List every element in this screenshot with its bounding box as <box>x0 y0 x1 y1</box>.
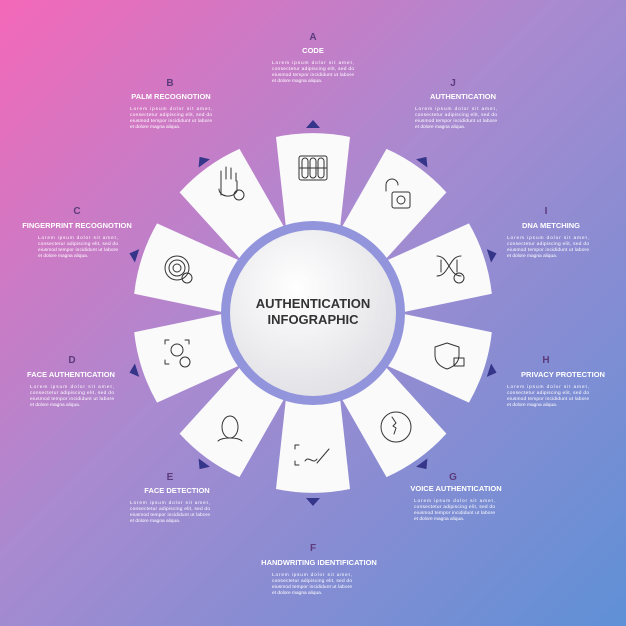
label D <box>27 355 115 408</box>
label B: et dolore magna aliqua. <box>130 124 180 130</box>
label E <box>130 472 210 524</box>
icon: palm <box>219 167 244 200</box>
icon: face detection <box>218 416 242 441</box>
label I: I <box>545 206 548 217</box>
label I: eiusmod tempor incididunt ut labore <box>507 247 589 253</box>
label F: et dolore magna aliqua. <box>272 590 322 596</box>
label D: consectetur adipiscing elit, sed do <box>30 390 114 396</box>
label D: et dolore magna aliqua. <box>30 402 80 408</box>
label E: Lorem ipsum dolor sit amet, <box>130 500 210 506</box>
label I: DNA METCHING <box>522 221 580 230</box>
pointer triangles <box>127 120 499 506</box>
icon: shield lock <box>435 343 464 369</box>
label C: C <box>73 206 81 217</box>
label H: Lorem ipsum dolor sit amet, <box>507 384 589 390</box>
label F: consectetur adipiscing elit, sed do <box>272 578 352 584</box>
label G: G <box>449 472 457 483</box>
center circle: AUTHENTICATION <box>256 296 370 311</box>
label I: Lorem ipsum dolor sit amet, <box>507 235 589 241</box>
label G <box>410 472 502 522</box>
label A: A <box>309 32 317 43</box>
label C: et dolore magna aliqua. <box>38 253 88 259</box>
label A: CODE <box>302 46 324 55</box>
label B: Lorem ipsum dolor sit amet, <box>130 106 212 112</box>
petals wheel <box>131 133 495 493</box>
icon: DNA <box>437 256 464 283</box>
label G: eiusmod tempor incididunt ut labore <box>414 510 495 516</box>
label I: consectetur adipiscing elit, sed do <box>507 241 589 247</box>
label G: et dolore magna aliqua. <box>414 516 464 522</box>
label A: Lorem ipsum dolor sit amet, <box>272 60 354 66</box>
icon: fingerprint <box>165 256 192 283</box>
label H <box>507 355 605 408</box>
label B <box>130 78 212 130</box>
label J: Lorem ipsum dolor sit amet, <box>415 106 497 112</box>
label H: H <box>542 355 550 366</box>
label G: Lorem ipsum dolor sit amet, <box>414 498 495 504</box>
center circle: INFOGRAPHIC <box>268 312 359 327</box>
label E: E <box>167 472 174 483</box>
label B: PALM RECOGNOTION <box>131 92 211 101</box>
icon: code lock <box>299 156 327 180</box>
label D: Lorem ipsum dolor sit amet, <box>30 384 114 390</box>
label B: consectetur adipiscing elit, sed do <box>130 112 212 118</box>
label G: VOICE AUTHENTICATION <box>410 484 502 493</box>
label A: eiusmod tempor incididunt ut labore <box>272 72 354 78</box>
label F: HANDWRITING IDENTIFICATION <box>261 558 377 567</box>
label F: Lorem ipsum dolor sit amet, <box>272 572 352 578</box>
label C: FINGERPRINT RECOGNOTION <box>22 221 132 230</box>
label E: eiusmod tempor incididunt ut labore <box>130 512 210 518</box>
label B: B <box>166 78 174 89</box>
label J: J <box>450 78 456 89</box>
label C <box>22 206 132 259</box>
label B: eiusmod tempor incididunt ut labore <box>130 118 212 124</box>
label F: F <box>310 543 316 554</box>
center circle <box>221 221 405 405</box>
label J <box>415 78 497 130</box>
label I: et dolore magna aliqua. <box>507 253 557 259</box>
label F: eiusmod tempor incididunt ut labore <box>272 584 352 590</box>
label J: eiusmod tempor incididunt ut labore <box>415 118 497 124</box>
label H: PRIVACY PROTECTION <box>521 370 605 379</box>
label H: et dolore magna aliqua. <box>507 402 557 408</box>
label E: et dolore magna aliqua. <box>130 518 180 524</box>
label H: eiusmod tempor incididunt ut labore <box>507 396 589 402</box>
label A: et dolore magna aliqua. <box>272 78 322 84</box>
label D: FACE AUTHENTICATION <box>27 370 115 379</box>
label C: consectetur adipiscing elit, sed do <box>38 241 118 247</box>
label C: eiusmod tempor incididunt ut labore <box>38 247 118 253</box>
icon: face authentication <box>165 340 190 367</box>
label H: consectetur adipiscing elit, sed do <box>507 390 589 396</box>
label J: et dolore magna aliqua. <box>415 124 465 130</box>
label F <box>261 543 377 596</box>
label I <box>507 206 589 259</box>
label D: eiusmod tempor incididunt ut labore <box>30 396 114 402</box>
label C: Lorem ipsum dolor sit amet, <box>38 235 118 241</box>
label J: AUTHENTICATION <box>430 92 496 101</box>
label E: consectetur adipiscing elit, sed do <box>130 506 210 512</box>
icon: voice face <box>381 412 411 442</box>
label J: consectetur adipiscing elit, sed do <box>415 112 497 118</box>
label E: FACE DETECTION <box>144 486 210 495</box>
icon: open padlock face <box>386 179 410 208</box>
label A: consectetur adipiscing elit, sed do <box>272 66 354 72</box>
label D: D <box>68 355 76 366</box>
label A <box>272 32 354 84</box>
label G: consectetur adipiscing elit, sed do <box>414 504 495 510</box>
icon: handwriting <box>295 445 329 465</box>
